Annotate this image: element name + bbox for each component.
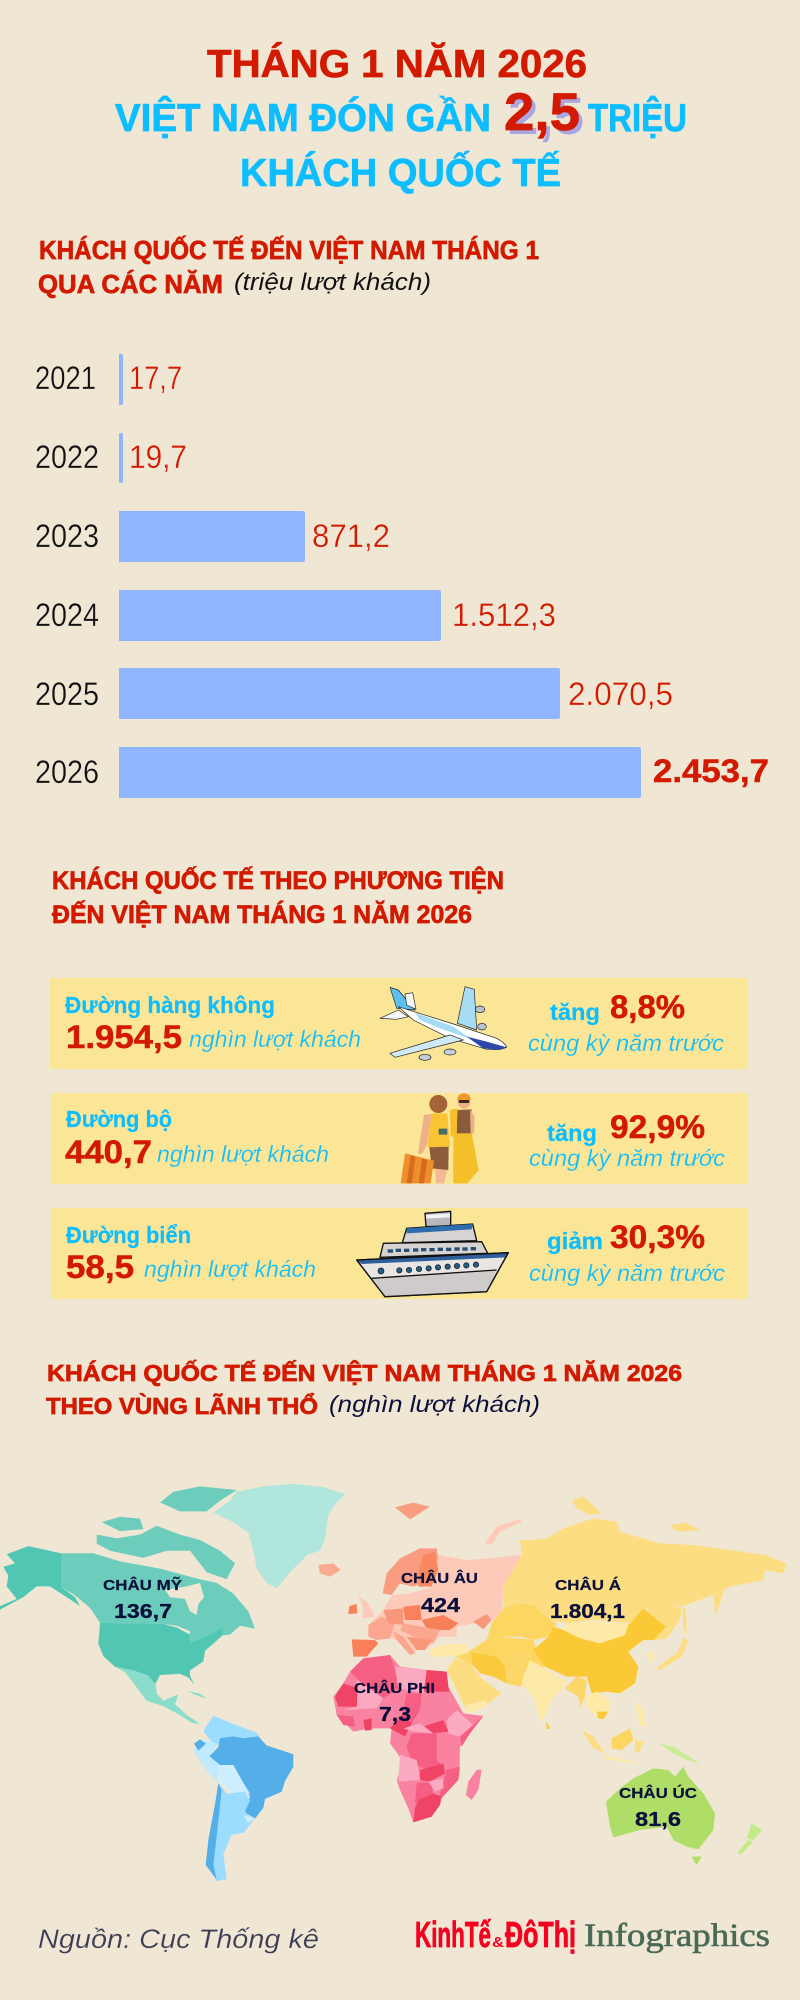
bar 2022: [35, 433, 187, 483]
panel: road transport: [51, 1093, 748, 1184]
label: Europe: CHÂU ÂU: [401, 1569, 478, 1587]
region: Eurasia, Africa, Oceania: [318, 1497, 787, 1865]
logo: ĐôThị: [505, 1914, 576, 1955]
bar 2021: 2021: [35, 360, 96, 396]
panel: sea transport: 30,3%: [610, 1219, 705, 1255]
panel: road transport: cùng kỳ năm trước: [529, 1145, 726, 1171]
heading: visitors by year: [38, 235, 539, 299]
title: 2,5: [504, 83, 580, 142]
icon: airplane: [380, 987, 507, 1060]
label: Oceania: 81,6: [635, 1809, 681, 1831]
heading: visitors by year: QUA CÁC NĂM: [38, 269, 223, 299]
bar chart: visitors per year: [35, 354, 769, 798]
label: Europe: 424: [421, 1595, 461, 1617]
heading: visitors by region: (nghìn lượt khách): [329, 1391, 540, 1417]
source note: Nguồn: Cục Thống kê: [38, 1924, 319, 1954]
bar 2025: 2025: [35, 676, 99, 712]
title: VIỆT NAM ĐÓN GẦN: [115, 96, 491, 140]
bar 2026: [35, 747, 769, 798]
title: 2,5: [508, 87, 584, 146]
bar 2021: 17,7: [129, 360, 182, 396]
heading: visitors by year: KHÁCH QUỐC TẾ ĐẾN VIỆT NAM THÁNG 1: [39, 235, 539, 265]
bar 2025: 2.070,5: [568, 676, 673, 712]
bar 2024: [35, 590, 556, 641]
bar 2026: 2026: [35, 754, 99, 790]
panel: air transport: 1.954,5: [66, 1019, 182, 1055]
heading: visitors by year: (triệu lượt khách): [234, 269, 431, 296]
icon: cruise ship: [357, 1211, 508, 1297]
label: Asia: 1.804,1: [550, 1601, 625, 1623]
heading: visitors by transport: KHÁCH QUỐC TẾ THEO PHƯƠNG TIỆN: [52, 865, 504, 895]
region: Americas: [0, 1484, 345, 1881]
icon: travellers: [401, 1093, 479, 1183]
panel: road transport: Đường bộ: [66, 1106, 172, 1132]
bar 2023: [35, 511, 390, 562]
bar 2023: 2023: [35, 518, 99, 554]
panel: air transport: cùng kỳ năm trước: [528, 1030, 725, 1056]
heading: visitors by region: [46, 1359, 682, 1419]
label: Africa: 7,3: [379, 1704, 411, 1726]
logo: KinhTế: [415, 1914, 492, 1955]
title: TRIỆU: [588, 96, 687, 140]
heading: visitors by region: THEO VÙNG LÃNH THỔ: [46, 1392, 318, 1419]
title: THÁNG 1 NĂM 2026: [207, 42, 587, 86]
label: Oceania: [619, 1784, 697, 1831]
panel: road transport: 440,7: [65, 1134, 152, 1170]
panel: air transport: Đường hàng không: [65, 992, 275, 1018]
heading: visitors by transport: ĐẾN VIỆT NAM THÁNG 1 NĂM 2026: [52, 899, 472, 929]
logo: Infographics: [584, 1918, 770, 1954]
bar 2024: 2024: [35, 597, 99, 633]
label: Africa: [354, 1679, 435, 1726]
bar 2024: 1.512,3: [452, 597, 556, 633]
bar 2022: 2022: [35, 439, 99, 475]
heading: visitors by region: KHÁCH QUỐC TẾ ĐẾN VIỆT NAM THÁNG 1 NĂM 2026: [47, 1359, 682, 1386]
panel: air transport: 8,8%: [610, 989, 685, 1025]
panel: road transport: tăng: [547, 1120, 597, 1146]
panel: sea transport: giảm: [547, 1228, 603, 1254]
panel: sea transport: [51, 1208, 748, 1299]
label: Africa: CHÂU PHI: [354, 1679, 435, 1697]
label: Americas: 136,7: [114, 1601, 172, 1623]
label: Asia: CHÂU Á: [555, 1576, 621, 1594]
label: Americas: [103, 1576, 182, 1623]
panel: air transport: [50, 978, 747, 1069]
panel: road transport: nghìn lượt khách: [157, 1141, 329, 1167]
bar 2021: [35, 354, 182, 405]
logo: &: [492, 1934, 504, 1951]
panel: air transport: nghìn lượt khách: [189, 1026, 361, 1052]
logo: [415, 1914, 770, 1955]
title: KHÁCH QUỐC TẾ: [240, 150, 561, 195]
title: [115, 42, 687, 195]
bar 2023: 871,2: [312, 518, 390, 554]
label: Asia: [550, 1576, 625, 1623]
panel: sea transport: Đường biển: [66, 1222, 191, 1248]
bar 2022: 19,7: [129, 439, 187, 475]
panel: sea transport: cùng kỳ năm trước: [529, 1260, 726, 1286]
heading: visitors by transport: [52, 865, 504, 929]
bar 2025: [35, 668, 673, 719]
label: Europe: [401, 1569, 478, 1617]
label: Oceania: CHÂU ÚC: [619, 1784, 697, 1802]
panel: sea transport: nghìn lượt khách: [144, 1256, 316, 1282]
panel: air transport: tăng: [550, 999, 600, 1025]
panel: road transport: 92,9%: [610, 1109, 705, 1145]
label: Americas: CHÂU MỸ: [103, 1576, 182, 1594]
world map: [0, 1484, 787, 1881]
panel: sea transport: 58,5: [66, 1249, 134, 1285]
bar 2026: 2.453,7: [653, 753, 769, 789]
